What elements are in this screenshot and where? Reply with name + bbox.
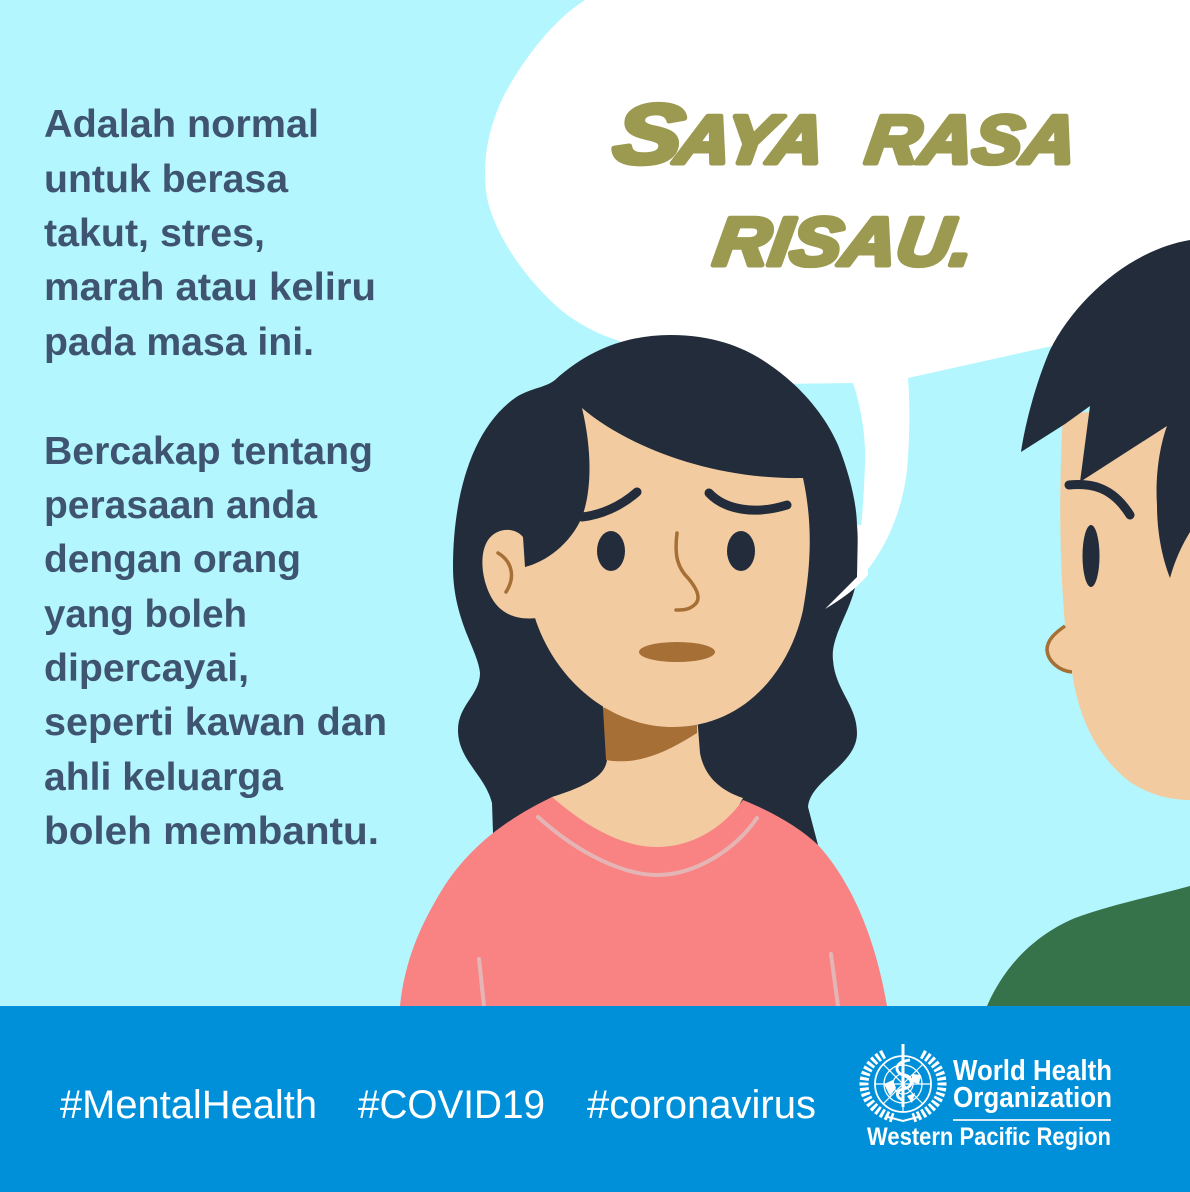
left text block: perasaan anda <box>44 484 317 527</box>
right eyebrow <box>709 493 787 510</box>
man hair <box>1021 240 1190 578</box>
left text block: marah atau keliru <box>44 266 376 309</box>
woman face <box>525 408 810 727</box>
left text block: untuk berasa <box>44 158 288 201</box>
man face <box>1047 400 1190 800</box>
hashtags: #MentalHealth <box>60 1083 317 1127</box>
left eyebrow <box>582 492 637 517</box>
man character <box>987 240 1190 1006</box>
speech bubble heading: S <box>608 87 690 181</box>
footer band <box>0 1006 1190 1192</box>
left text block: Adalah normal <box>44 103 319 146</box>
left eye <box>597 531 625 571</box>
icon: WHO emblem <box>864 1044 942 1121</box>
left text block: ahli keluarga <box>44 756 283 799</box>
woman hair <box>453 335 858 845</box>
left text block: pada masa ini. <box>44 321 314 364</box>
woman ear <box>482 530 540 618</box>
neck shadow <box>603 700 697 761</box>
ear inner line <box>498 553 511 592</box>
organisation name: World Health <box>953 1055 1112 1087</box>
nose <box>676 533 698 610</box>
left text block: dipercayai, <box>44 647 249 690</box>
organisation name: Organization <box>953 1082 1112 1114</box>
mouth <box>639 642 715 662</box>
shirt sleeve line left <box>479 959 484 1006</box>
shirt collar line <box>538 817 757 875</box>
man nose line <box>1047 626 1072 672</box>
shirt sleeve line right <box>831 954 838 1006</box>
speech bubble heading: RASA <box>862 102 1082 178</box>
left text block: yang boleh <box>44 593 247 636</box>
woman character <box>400 335 887 1006</box>
left text block: takut, stres, <box>44 212 265 255</box>
right eye <box>727 531 755 571</box>
speech bubble heading: RISAU. <box>710 204 979 280</box>
left text block: boleh membantu. <box>44 810 379 853</box>
speech bubble heading <box>608 87 1082 280</box>
man eyebrow <box>1069 485 1130 515</box>
speech bubble tail tip <box>825 525 868 609</box>
left text block: dengan orang <box>44 538 301 581</box>
hashtags <box>60 1083 816 1127</box>
hashtags: #coronavirus <box>587 1083 816 1127</box>
man shirt <box>987 886 1190 1006</box>
WHO logo <box>864 1044 1112 1151</box>
left text block <box>44 103 387 853</box>
hashtags: #COVID19 <box>358 1083 545 1127</box>
left text block: seperti kawan dan <box>44 701 387 744</box>
left text block: Bercakap tentang <box>44 430 373 473</box>
speech bubble heading: AYA <box>670 102 830 178</box>
organisation name <box>867 1055 1112 1151</box>
man eye <box>1082 525 1100 587</box>
woman neck <box>552 705 743 860</box>
speech bubble <box>485 0 1190 609</box>
woman shirt <box>400 797 887 1006</box>
organisation name: Western Pacific Region <box>867 1123 1111 1151</box>
